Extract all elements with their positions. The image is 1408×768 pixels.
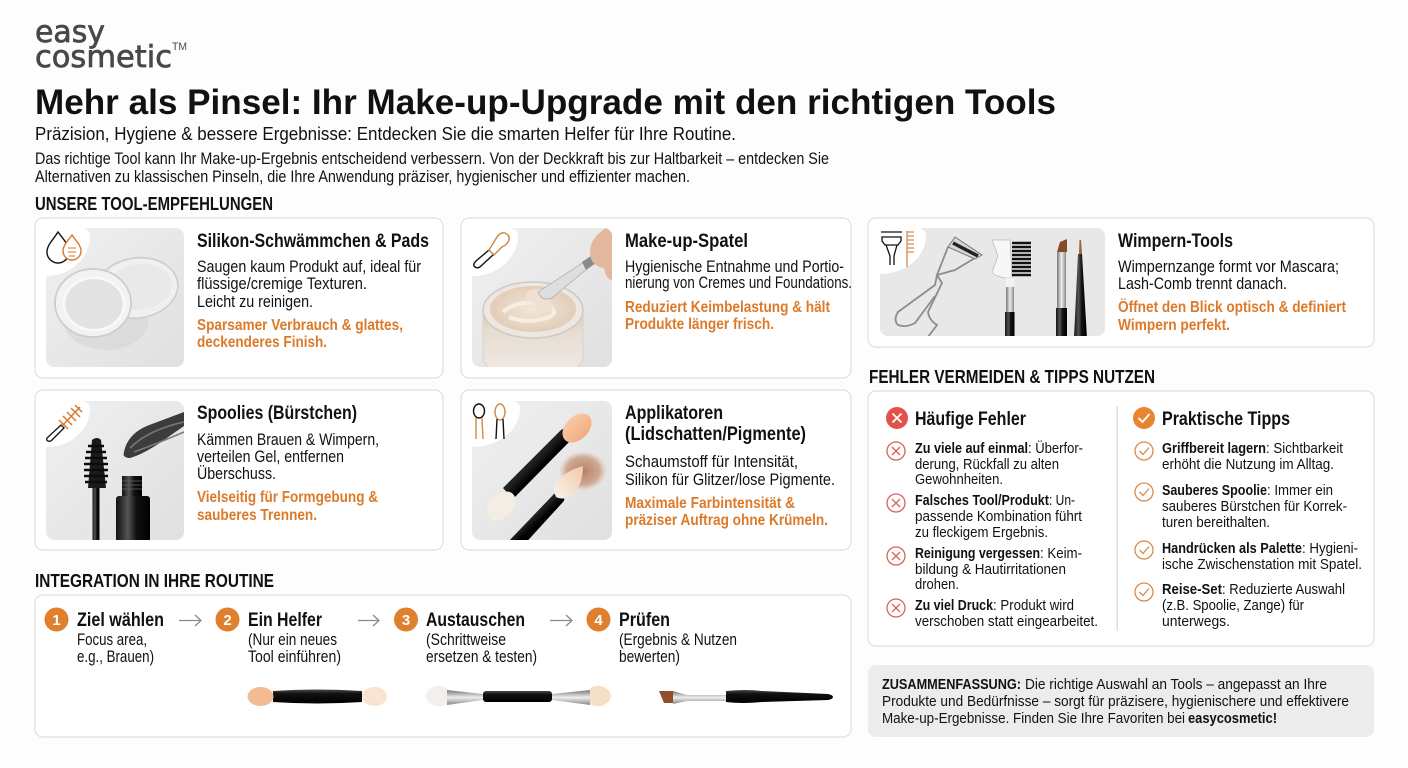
tool: applicator with metal ferrules — [426, 686, 611, 706]
mistake 4: : Produkt wird — [993, 597, 1074, 614]
mistake 1 — [887, 439, 1083, 488]
card text: Silikon für Glitzer/lose Pigmente. — [625, 471, 835, 489]
tip 2 — [1135, 482, 1347, 531]
image: silicone pads — [46, 228, 184, 367]
panel: lash tools — [868, 218, 1374, 347]
callout: summary: Produkte und Bedürfnisse – sorgt für präzisere, hygienischere und effektivere — [882, 693, 1349, 710]
panel: mistakes and tips — [868, 391, 1374, 646]
card text: Vielseitig für Formgebung & — [197, 489, 378, 506]
card text: deckenderes Finish. — [197, 334, 327, 351]
logo: easycosmetic: easy — [35, 15, 105, 50]
intro text: Alternativen zu klassischen Pinseln, die Ihre Anwendung präziser, hygienischer und effizienter machen. — [35, 168, 690, 186]
step 1: Focus area, — [77, 631, 147, 649]
mistake 4: verschoben statt eingearbeitet. — [915, 613, 1098, 630]
heading: common mistakes: Häufige Fehler — [915, 409, 1026, 430]
card text: Lash-Comb trennt danach. — [1118, 275, 1287, 293]
card text: sauberes Trennen. — [197, 507, 317, 524]
card text: Überschuss. — [197, 465, 276, 483]
tip 1: : Sichtbarkeit — [1266, 440, 1344, 457]
card text: flüssige/cremige Texturen. — [197, 275, 367, 293]
tip 3: Handrücken als Palette — [1162, 540, 1302, 557]
mistake 2: Falsches Tool/Produkt — [915, 492, 1049, 509]
step 3: 3 — [402, 612, 410, 629]
heading: mistakes and tips: FEHLER VERMEIDEN & TIPPS NUTZEN — [869, 366, 1155, 387]
card text: Hygienische Entnahme und Portio- — [625, 258, 844, 276]
tip 2: sauberes Bürstchen für Korrek- — [1162, 498, 1347, 515]
mistake 3: bildung & Hautirritationen — [915, 561, 1066, 578]
panel: applicators — [461, 390, 851, 550]
column: practical tips — [1133, 407, 1362, 630]
card text: Wimpern-Tools — [1118, 231, 1233, 252]
step 1: 1 — [52, 612, 61, 629]
card text: Wimpern perfekt. — [1118, 317, 1230, 334]
image: cream jar with spatula — [472, 226, 616, 370]
tool: angled brush — [659, 690, 833, 704]
card text: Schaumstoff für Intensität, — [625, 453, 798, 471]
step 1: e.g., Brauen) — [77, 648, 154, 666]
mistake 4: Zu viel Druck — [915, 597, 993, 614]
panel: routine steps — [35, 595, 851, 737]
icon: applicators — [472, 401, 520, 447]
mistake 3: drohen. — [915, 576, 959, 593]
tip 4: unterwegs. — [1162, 613, 1230, 630]
card text: Produkte länger frisch. — [625, 316, 774, 333]
logo: easycosmetic: TM — [172, 41, 187, 53]
step 4: bewerten) — [619, 648, 680, 666]
step 2: (Nur ein neues — [248, 631, 337, 649]
card text: Öffnet den Blick optisch & definiert — [1118, 297, 1347, 316]
icon: red cross — [886, 407, 908, 429]
logo: easycosmetic: cosmetic — [35, 40, 172, 75]
tip 4 — [1135, 581, 1345, 630]
image: sponge applicators — [472, 401, 612, 548]
tip 1: erhöht die Nutzung im Alltag. — [1162, 456, 1334, 473]
image: lash tools — [880, 228, 1105, 338]
callout: summary: Die richtige Auswahl an Tools – angepasst an Ihre — [1025, 676, 1327, 693]
step 3: Austauschen — [426, 610, 525, 631]
tip 3 — [1135, 540, 1362, 573]
card text: Kämmen Brauen & Wimpern, — [197, 431, 379, 449]
card text — [625, 403, 835, 529]
mistake 1: Zu viele auf einmal — [915, 440, 1028, 457]
callout: summary: Make-up-Ergebnisse. Finden Sie Ihre Favoriten bei — [882, 710, 1185, 727]
intro text — [35, 150, 829, 186]
mistake 2: zu fleckigem Ergebnis. — [915, 524, 1048, 541]
step 2: Tool einführen) — [248, 648, 341, 666]
step 4: 4 — [594, 612, 603, 629]
step 2: 2 — [223, 612, 232, 629]
card text: präziser Auftrag ohne Krümeln. — [625, 512, 828, 529]
arrow 3 — [550, 615, 572, 626]
card text: Maximale Farbintensität & — [625, 495, 795, 512]
logo: easycosmetic — [35, 15, 187, 75]
tool: double sponge applicator — [248, 687, 387, 706]
icon: drops — [46, 228, 90, 276]
step 1 — [44, 608, 164, 666]
step 2 — [216, 608, 341, 666]
step 3 — [394, 608, 537, 666]
tip 1: Griffbereit lagern — [1162, 440, 1266, 457]
card text: Saugen kaum Produkt auf, ideal für — [197, 258, 421, 276]
step 2: Ein Helfer — [248, 610, 322, 631]
tip 2: turen bereithalten. — [1162, 514, 1270, 531]
card text: nierung von Cremes und Foundations. — [625, 274, 852, 292]
step 3: (Schrittweise — [426, 631, 506, 649]
icon: orange check — [1133, 407, 1155, 429]
mistake 1: derung, Rückfall zu alten — [915, 456, 1059, 473]
mistake 1: : Überfor- — [1028, 439, 1083, 457]
card text: Silikon-Schwämmchen & Pads — [197, 231, 429, 252]
arrow 2 — [358, 615, 379, 626]
card text: (Lidschatten/Pigmente) — [625, 424, 806, 445]
card text: Reduziert Keimbelastung & hält — [625, 299, 831, 316]
heading: integration: INTEGRATION IN IHRE ROUTINE — [35, 570, 274, 591]
mistake 2 — [887, 492, 1083, 541]
tip 2: : Immer ein — [1267, 482, 1333, 499]
step 4: (Ergebnis & Nutzen — [619, 631, 737, 649]
tip 1 — [1135, 440, 1344, 473]
mistake 3: : Keim- — [1040, 545, 1082, 562]
card text — [197, 231, 429, 351]
mistake 4 — [887, 597, 1098, 630]
step 3: ersetzen & testen) — [426, 648, 537, 666]
mistake 2: : Un- — [1049, 492, 1075, 509]
title: Mehr als Pinsel: Ihr Make-up-Upgrade mit den richtigen Tools — [35, 82, 1056, 122]
tip 3: ische Zwischenstation mit Spatel. — [1162, 556, 1362, 573]
tip 4: : Reduzierte Auswahl — [1222, 581, 1345, 598]
icon: curler and comb — [880, 228, 926, 274]
mistake 2: passende Kombination führt — [915, 508, 1083, 525]
icon: spatula — [472, 228, 518, 276]
card text: Applikatoren — [625, 403, 723, 424]
callout: summary: easycosmetic! — [1188, 710, 1277, 727]
step 4: Prüfen — [619, 610, 670, 631]
image: spoolie and mascara — [46, 401, 184, 542]
panel: silicone sponges — [35, 218, 443, 378]
card text: Spoolies (Bürstchen) — [197, 403, 357, 424]
tip 4: (z.B. Spoolie, Zange) für — [1162, 597, 1304, 614]
column: common mistakes — [886, 407, 1098, 630]
tip 2: Sauberes Spoolie — [1162, 482, 1267, 499]
intro text: Das richtige Tool kann Ihr Make-up-Ergebnis entscheidend verbessern. Von der Deckkraft bis zur Haltbarkeit – entdecken Sie — [35, 150, 829, 168]
card text: Leicht zu reinigen. — [197, 293, 313, 311]
step 1: Ziel wählen — [77, 610, 164, 631]
mistake 3: Reinigung vergessen — [915, 545, 1040, 562]
tip 4: Reise-Set — [1162, 581, 1222, 598]
panel: spatula — [461, 218, 852, 378]
card text — [197, 403, 379, 524]
callout: summary: ZUSAMMENFASSUNG: — [882, 676, 1021, 693]
card text: verteilen Gel, entfernen — [197, 448, 344, 466]
card text — [625, 231, 852, 333]
step 4 — [586, 608, 737, 666]
card text — [1118, 231, 1347, 334]
panel: spoolies — [35, 390, 443, 550]
icon: spoolie — [46, 401, 90, 447]
heading: practical tips: Praktische Tipps — [1162, 409, 1290, 430]
mistake 3 — [887, 545, 1082, 593]
heading: tool recommendations: UNSERE TOOL-EMPFEHLUNGEN — [35, 193, 273, 214]
callout: summary — [868, 665, 1374, 737]
mistake 1: Gewohnheiten. — [915, 471, 1003, 488]
card text: Sparsamer Verbrauch & glattes, — [197, 317, 403, 334]
tip 3: : Hygieni- — [1302, 540, 1358, 557]
card text: Make-up-Spatel — [625, 231, 748, 252]
card text: Wimpernzange formt vor Mascara; — [1118, 258, 1339, 276]
subtitle: Präzision, Hygiene & bessere Ergebnisse: Entdecken Sie die smarten Helfer für Ihre Routine. — [35, 123, 736, 144]
arrow 1 — [179, 615, 201, 626]
